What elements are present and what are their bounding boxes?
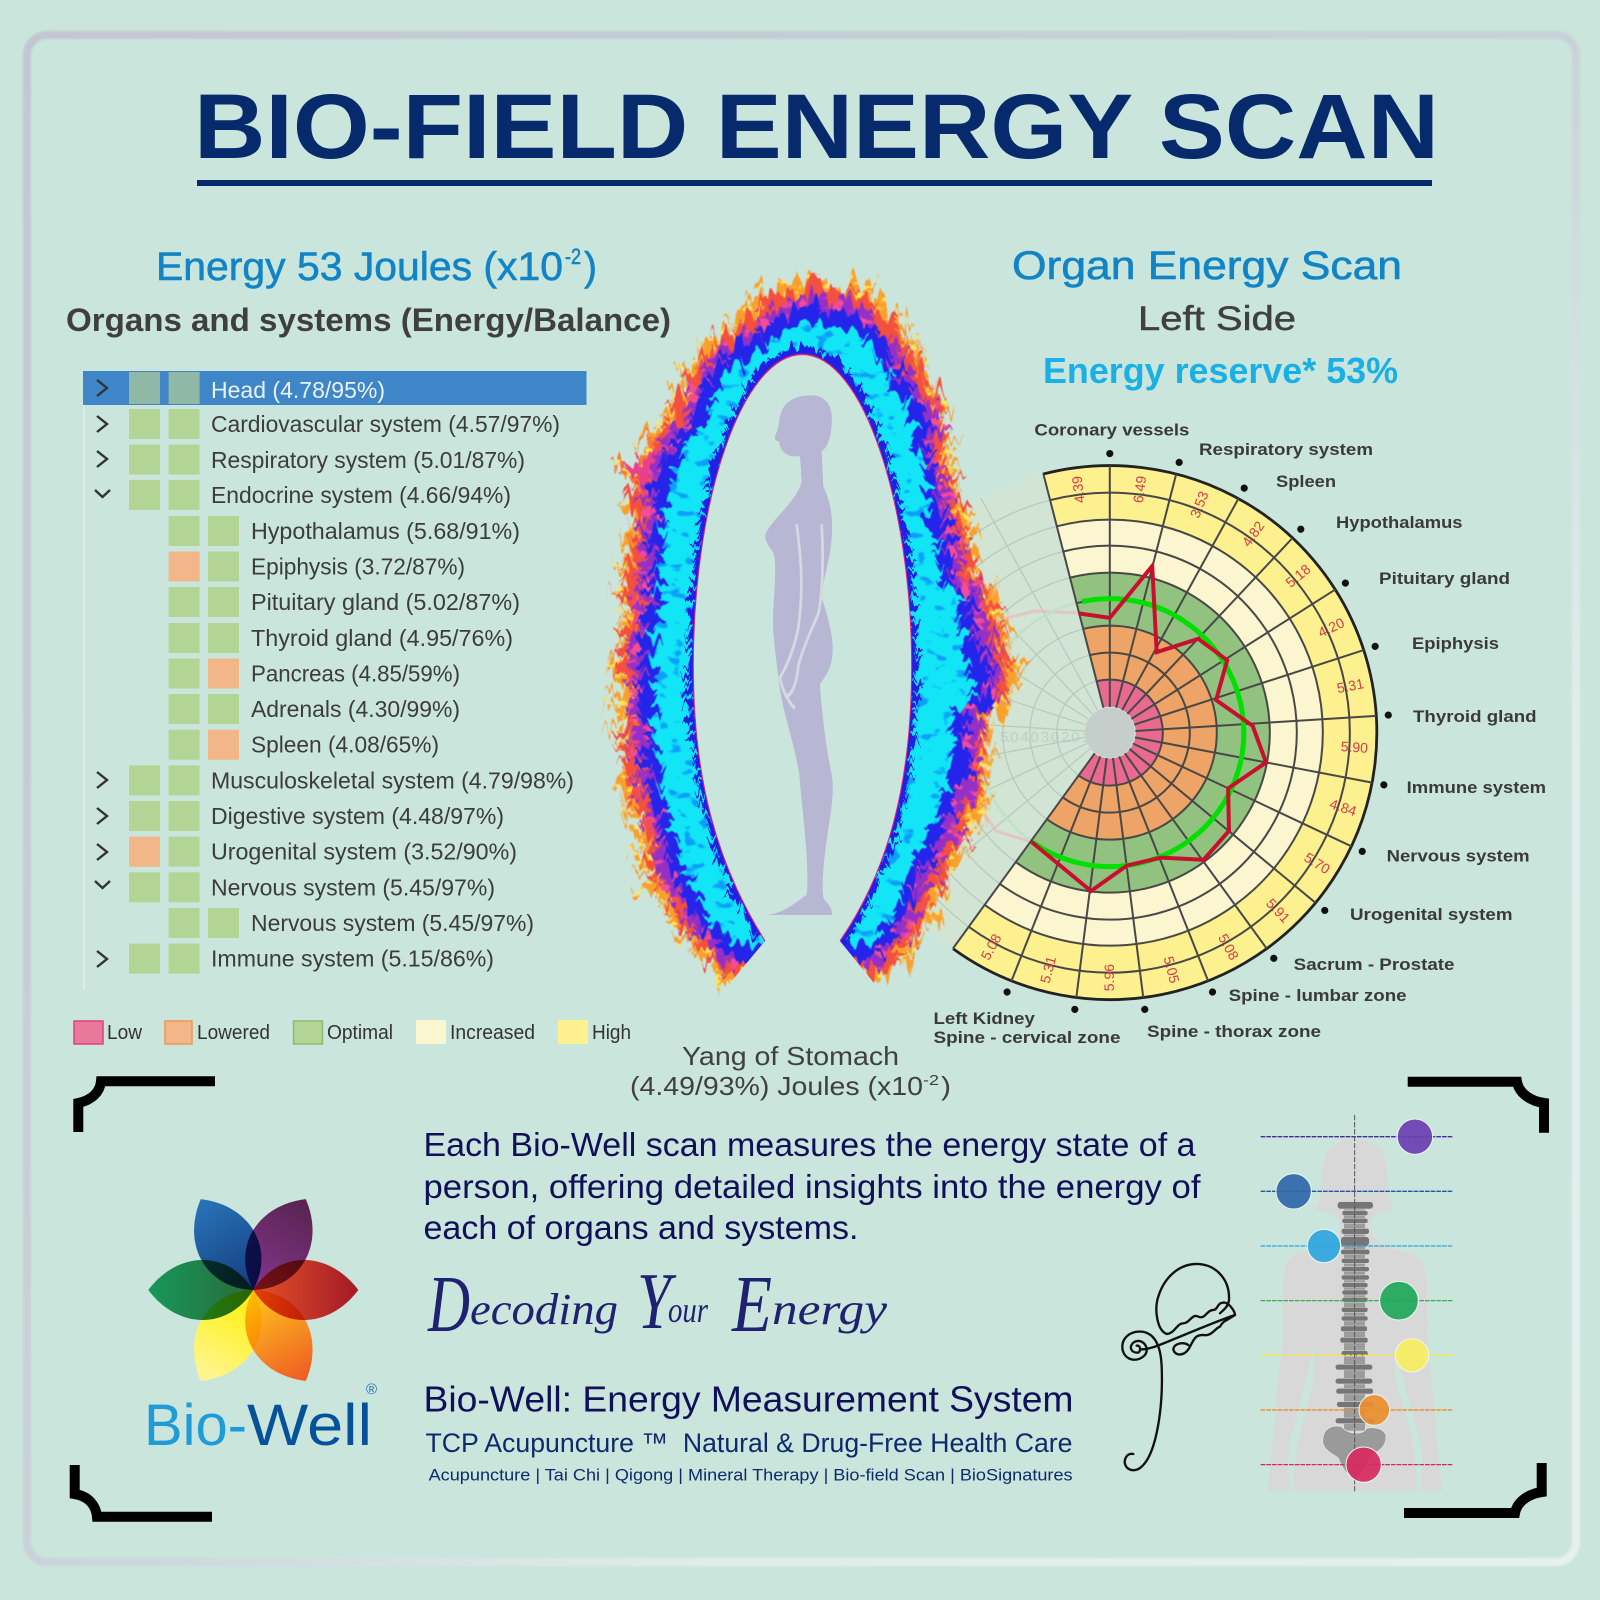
legend: Increased <box>450 1022 535 1044</box>
row: immune <box>97 944 494 974</box>
radar: axis labels: Epiphysis <box>1412 635 1499 653</box>
row: cardiovascular: Cardiovascular system (4.57/97%) <box>211 411 560 437</box>
row: head: Head (4.78/95%) <box>211 377 385 403</box>
row: spleen: Spleen (4.08/65%) <box>251 732 439 758</box>
radar grid <box>785 408 1435 1058</box>
radar: red data line <box>1032 566 1266 891</box>
radar chart <box>785 408 1546 1058</box>
script tagline <box>427 1258 888 1349</box>
row: musculoskeletal: Musculoskeletal system (4.79/98%) <box>211 767 574 793</box>
spine <box>1323 1202 1386 1478</box>
radar: zone values: 4.20 <box>1315 614 1347 640</box>
radar: axis labels: Urogenital system <box>1350 906 1512 924</box>
row: endocrine: Endocrine system (4.66/94%) <box>211 482 511 508</box>
radar: zone values: 5.90 <box>1340 738 1369 756</box>
legend: Lowered <box>197 1022 270 1044</box>
radar: zone values: 5.70 <box>1301 849 1333 877</box>
row: epiphysis <box>169 552 465 582</box>
text block: description: person, offering detailed insights into the energy of <box>424 1168 1201 1205</box>
row: respiratory <box>97 444 525 474</box>
heading: organ energy scan: Organ Energy Scan <box>1012 244 1402 288</box>
row: nervous: Nervous system (5.45/97%) <box>211 874 495 900</box>
row: adrenals: Adrenals (4.30/99%) <box>251 696 460 722</box>
radar: zone values: 5.31 <box>1037 954 1059 985</box>
radar: zone values: 6.49 <box>1130 475 1149 504</box>
radar rings: coloured zones <box>818 440 1402 1025</box>
caption: yang of stomach: ) <box>941 1071 951 1101</box>
script tagline: ecoding <box>470 1285 618 1334</box>
caption: yang of stomach: (4.49/93%) Joules (x10 <box>630 1071 923 1101</box>
caption: yang of stomach: -2 <box>923 1072 939 1089</box>
radar: zone values: 4.39 <box>1068 475 1088 504</box>
radar: axis labels <box>934 422 1546 1047</box>
row: pancreas: Pancreas (4.85/59%) <box>251 660 460 686</box>
heading: energy joules: Energy 53 Joules (x10 <box>156 245 563 289</box>
radar: axis labels: Spine - lumbar zone <box>1229 987 1407 1005</box>
logo: bio-well wordmark: ® <box>366 1381 377 1398</box>
text block: description: each of organs and systems. <box>424 1209 858 1246</box>
radar ghost: faded left part: 5.0 4.0 3.0 2.0 1.0 <box>1000 729 1100 746</box>
row: nervous <box>95 872 495 902</box>
legend: High <box>592 1022 631 1044</box>
radar: axis labels: Respiratory system <box>1199 441 1373 459</box>
radar: axis labels: Thyroid gland <box>1413 708 1537 726</box>
row: cardiovascular <box>97 409 560 439</box>
heading: energy joules: ) <box>584 245 597 289</box>
radar: zone values: 5.31 <box>1335 675 1365 696</box>
radar: axis labels: Sacrum - Prostate <box>1294 956 1454 974</box>
row: thyroid <box>169 623 513 653</box>
row: nervous sub: Nervous system (5.45/97%) <box>251 910 534 936</box>
row: pituitary: Pituitary gland (5.02/87%) <box>251 589 520 615</box>
script tagline: E <box>731 1261 772 1349</box>
radar: zone values: 5.05 <box>1161 954 1183 985</box>
logo: bio-well wordmark: Well <box>247 1393 372 1458</box>
logo: bio-well wordmark <box>144 1381 377 1458</box>
row: digestive: Digestive system (4.48/97%) <box>211 803 504 829</box>
logo: bio-well flower <box>148 1184 358 1396</box>
radar: axis labels: Spine - cervical zone <box>934 1029 1120 1047</box>
radar: axis labels: Nervous system <box>1387 848 1530 866</box>
script tagline: our <box>668 1290 709 1330</box>
title: BIO-FIELD ENERGY SCAN <box>194 76 1439 178</box>
legend: Optimal <box>327 1022 393 1044</box>
text block: description <box>424 1126 1201 1246</box>
tagline: tcp acupuncture: TCP Acupuncture ™ Natural & Drug-Free Health Care <box>426 1428 1072 1458</box>
chakra circles <box>1276 1119 1433 1482</box>
row: musculoskeletal <box>97 765 574 795</box>
row: urogenital: Urogenital system (3.52/90%) <box>211 839 517 865</box>
radar ghost: faded left part <box>843 493 1350 973</box>
heading: energy joules: -2 <box>565 244 581 269</box>
radar: zone values: 5.08 <box>977 931 1005 963</box>
organ table <box>83 371 586 990</box>
row: respiratory: Respiratory system (5.01/87%) <box>211 447 525 473</box>
row: thyroid: Thyroid gland (4.95/76%) <box>251 625 513 651</box>
corner bracket: top left <box>78 1081 215 1132</box>
corner bracket: bottom right <box>1404 1463 1542 1513</box>
icon: line-art squiggle <box>1122 1264 1235 1470</box>
chakra figure <box>1261 1115 1453 1492</box>
row: endocrine <box>95 480 511 510</box>
row: hypothalamus: Hypothalamus (5.68/91%) <box>251 518 520 544</box>
radar: green reference arc <box>951 574 1269 892</box>
corner bracket: top right <box>1408 1082 1544 1133</box>
chakra lines <box>1261 1115 1453 1492</box>
heading: measurement system: Bio-Well: Energy Measurement System <box>424 1378 1074 1420</box>
radar: zone values: 4.82 <box>1239 518 1268 550</box>
subheading: organs and systems: Organs and systems (Energy/Balance) <box>66 302 671 338</box>
radar: axis labels: Left Kidney <box>934 1010 1036 1028</box>
radar: axis labels: Spleen <box>1276 473 1336 491</box>
radar: axis labels: Hypothalamus <box>1336 514 1462 532</box>
script tagline: Y <box>637 1258 677 1346</box>
row: pituitary <box>169 587 520 617</box>
figure silhouette <box>1268 1139 1443 1491</box>
row: head <box>83 371 586 405</box>
subheading: energy reserve: Energy reserve* 53% <box>1043 350 1398 391</box>
radar: axis labels: Coronary vessels <box>1034 422 1189 440</box>
legend <box>74 1020 631 1044</box>
subheading: left side: Left Side <box>1138 300 1296 338</box>
caption: yang of stomach: Yang of Stomach <box>682 1041 899 1071</box>
radar: zone values: 5.96 <box>1101 964 1117 991</box>
logo: bio-well wordmark: Bio- <box>144 1393 247 1458</box>
row: epiphysis: Epiphysis (3.72/87%) <box>251 554 465 580</box>
radar: zone values: 5.18 <box>1282 561 1314 591</box>
script tagline: nergy <box>772 1285 888 1334</box>
radar: zone values <box>977 475 1369 991</box>
row: digestive <box>97 801 504 831</box>
radar: axis dots <box>1002 450 1392 1013</box>
script tagline: D <box>427 1261 470 1349</box>
radar: zone values: 5.91 <box>1263 895 1294 926</box>
corner bracket: bottom left <box>75 1465 212 1517</box>
body silhouette <box>765 395 833 915</box>
aura: biofield glow <box>609 274 1017 1015</box>
services list: Acupuncture | Tai Chi | Qigong | Mineral Therapy | Bio-field Scan | BioSignatures <box>429 1466 1073 1485</box>
row: adrenals <box>169 694 460 724</box>
radar: axis labels: Pituitary gland <box>1379 570 1510 588</box>
row: pancreas <box>169 658 460 688</box>
radar: zone values: 3.53 <box>1187 489 1212 520</box>
radar: axis labels: Immune system <box>1407 779 1546 797</box>
row: nervous sub <box>169 908 534 938</box>
row: hypothalamus <box>169 516 520 546</box>
radar: axis labels: Spine - thorax zone <box>1147 1023 1321 1041</box>
row: spleen <box>169 730 439 760</box>
legend: Low <box>107 1022 143 1044</box>
row: urogenital <box>97 837 517 867</box>
caption: yang of stomach <box>630 1041 951 1101</box>
radar: zone values: 5.08 <box>1215 931 1242 963</box>
text block: description: Each Bio-Well scan measures the energy state of a <box>424 1126 1196 1163</box>
radar: zone values: 4.84 <box>1328 796 1359 819</box>
row: immune: Immune system (5.15/86%) <box>211 946 494 972</box>
